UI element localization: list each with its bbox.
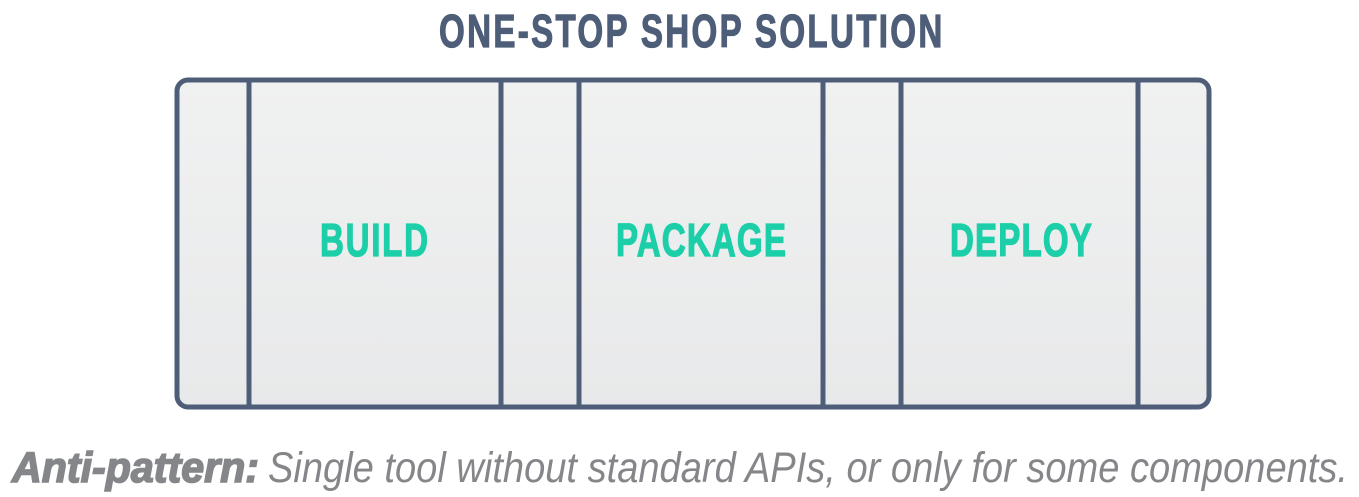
label: build: BUILD — [320, 216, 428, 266]
caption: anti-pattern: Anti-pattern: — [11, 444, 259, 492]
panel: solution box — [177, 80, 1209, 407]
label: package: PACKAGE — [616, 216, 786, 266]
title: ONE-STOP SHOP SOLUTION — [439, 7, 942, 57]
label: deploy: DEPLOY — [950, 216, 1092, 266]
